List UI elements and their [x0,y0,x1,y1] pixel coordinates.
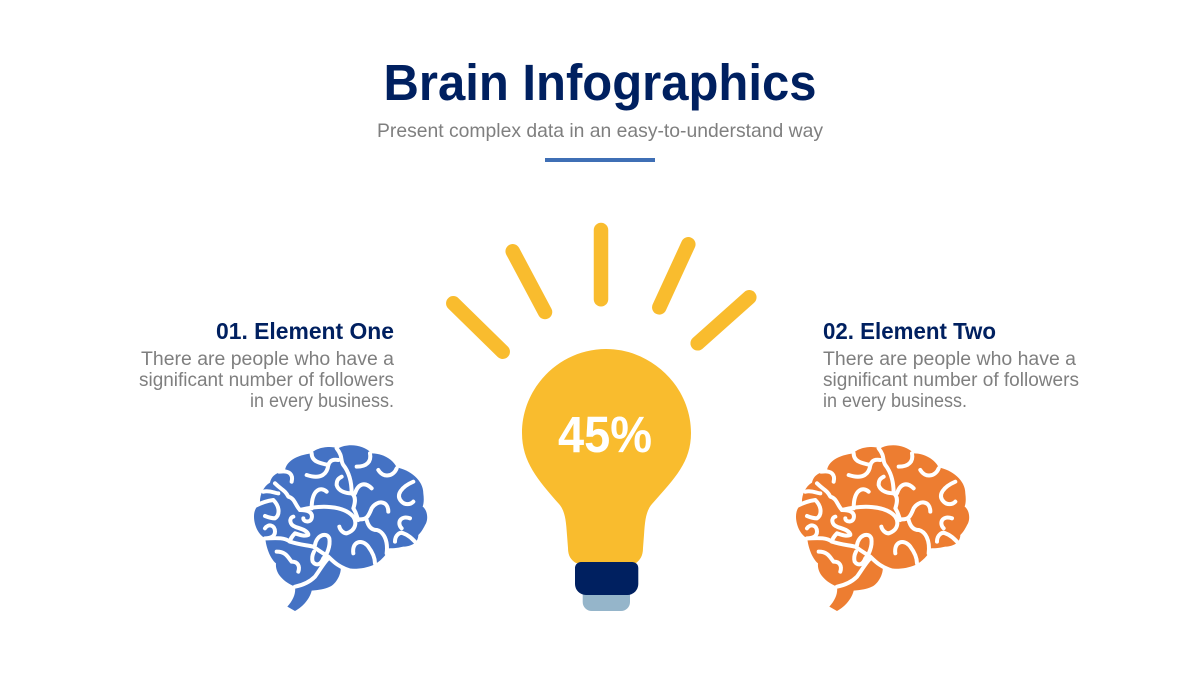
text block: element one description: significant number of followers [139,370,394,391]
title underline [545,158,655,162]
title: Brain Infographics [384,54,816,111]
heading: element one: 01. Element One [216,318,394,344]
heading: element two: 02. Element Two [823,318,996,344]
panel: element one [139,318,394,412]
text block: element two description: in every business. [823,391,967,412]
icon: light bulb [522,349,691,611]
subtitle: Present complex data in an easy-to-understand way [377,120,823,142]
text block: element one description [139,349,394,412]
text block: element two description: significant number of followers [823,370,1079,391]
percentage value: 45% [558,406,652,463]
panel: element two [823,318,1079,412]
text block: element two description [823,349,1079,412]
text block: element one description: There are people who have a [141,349,394,370]
text block: element two description: There are people who have a [823,349,1076,370]
text block: element one description: in every business. [250,391,394,412]
icon: blue brain [254,445,427,611]
icon: light rays [453,230,749,352]
icon: orange brain [796,445,969,611]
